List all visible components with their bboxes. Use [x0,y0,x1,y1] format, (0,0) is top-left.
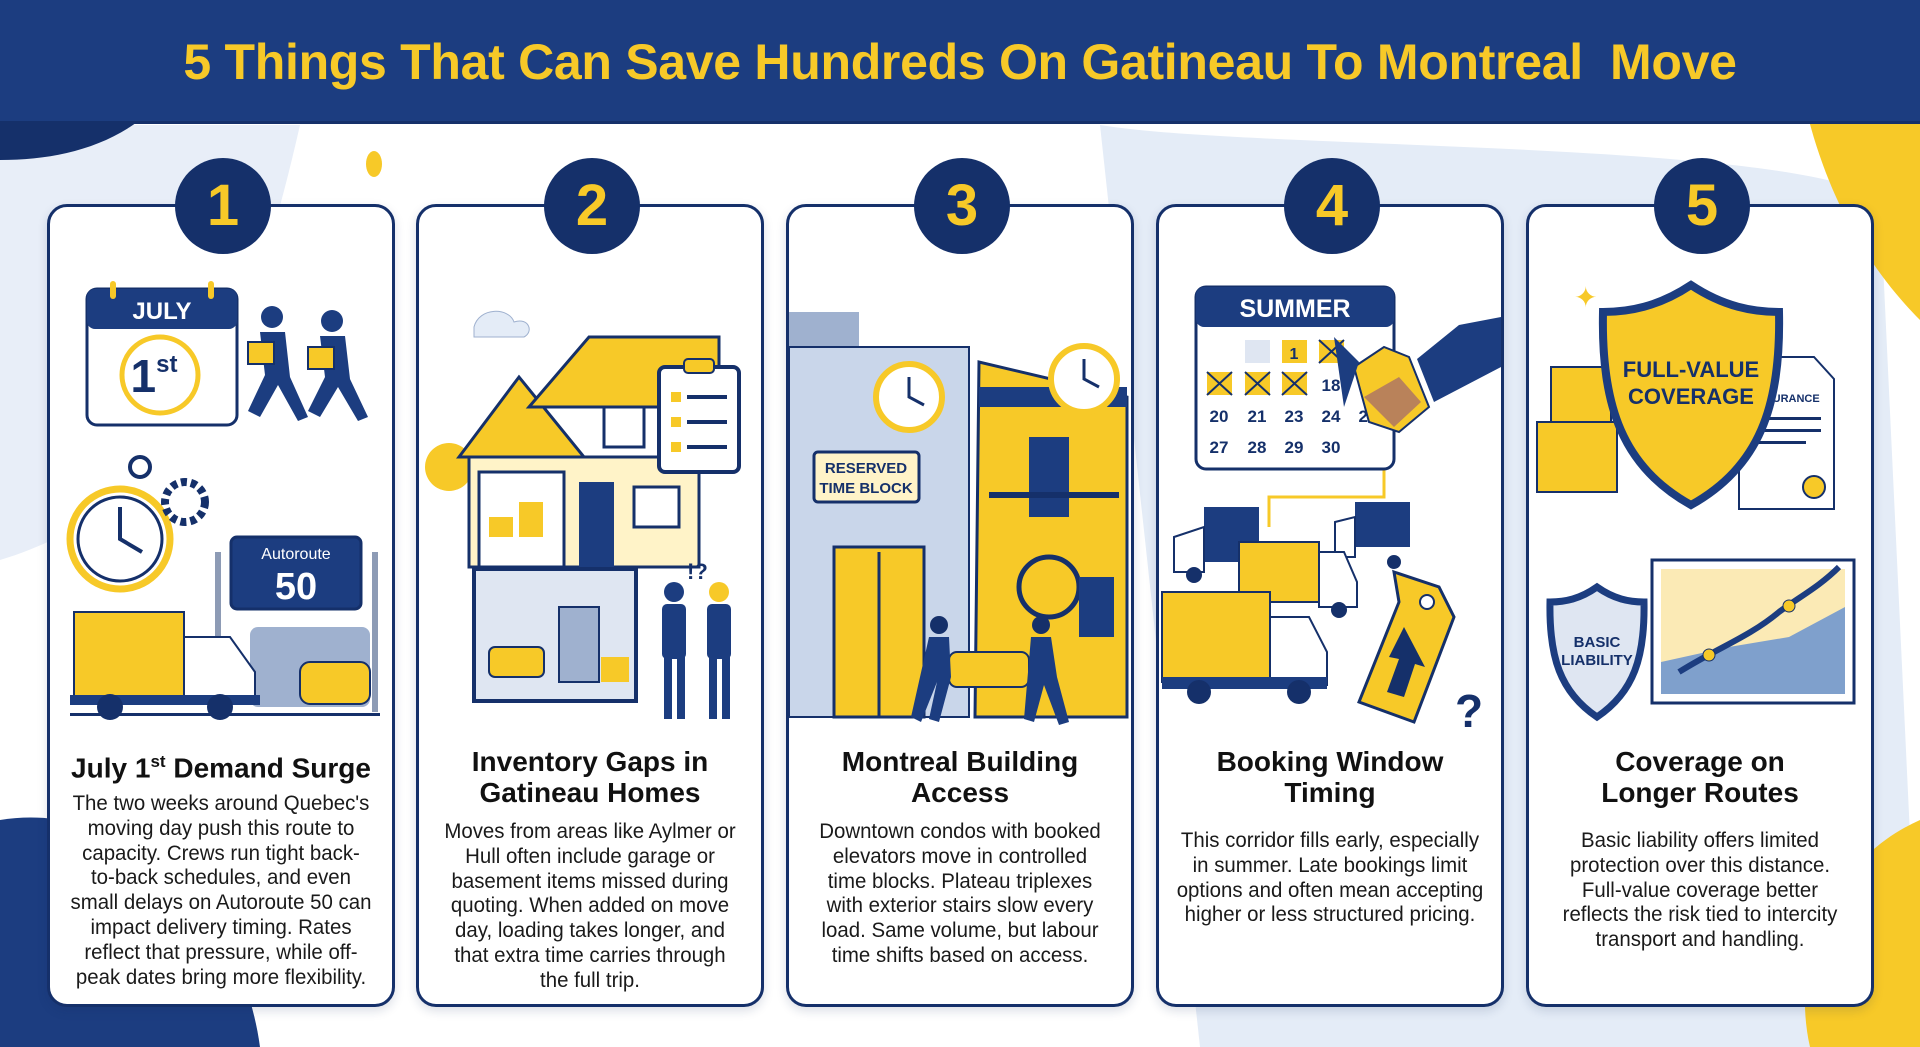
icon: clock and gears [70,457,205,589]
heading: Longer Routes [1601,777,1799,808]
icon: insurance document [1739,357,1834,509]
text block: time shifts based on access. [832,943,1088,967]
panel: card 3 [786,204,1134,1007]
text block: reflect that pressure, while off- [84,940,358,964]
text block: transport and handling. [1596,927,1804,951]
heading: Inventory Gaps in [472,746,708,777]
icon: price tag with arrow: ? [1455,685,1483,737]
illustration: full-value shield, insurance, basic shield, map [1536,280,1856,722]
text block [1177,828,1483,926]
icon: calendar july: st [156,351,177,378]
number badge 1 [175,158,271,254]
icon: summer calendar: 23 [1285,407,1303,426]
number badge 4: 4 [1316,173,1348,238]
icon: full-value shield: COVERAGE [1628,384,1754,409]
text block: quoting. When added on move [451,893,729,917]
icon: running movers [248,306,368,421]
text block: capacity. Crews run tight back- [82,841,360,865]
text block: impact delivery timing. Rates [90,915,352,939]
text block: Hull often include garage or [465,844,715,868]
icon: clipboard [659,359,739,472]
text block: in summer. Late bookings limit [1193,853,1467,877]
number badge 3 [914,158,1010,254]
icon: summer calendar: 24 [1322,407,1341,426]
illustration: house with garage and basement [425,310,741,719]
text block [819,819,1101,967]
icon: calendar july: 1 [131,350,156,402]
panel: card 5 [1526,204,1874,1007]
icon: movers carrying sofa [911,616,1069,725]
icon: condo tower with elevator: TIME BLOCK [819,480,913,497]
icon: insurance document: INSURANCE [1754,393,1820,405]
text block: small delays on Autoroute 50 can [71,890,371,914]
heading: Coverage on [1615,746,1785,777]
heading [1601,746,1799,808]
number badge 5 [1654,158,1750,254]
icon: summer calendar: 21 [1248,407,1266,426]
heading: Access [911,777,1009,808]
icon: boxes [1537,367,1617,492]
heading: Timing [1284,777,1376,808]
illustration: july calendar, runners, clock, highway, truck [66,281,380,720]
number badge 1: 1 [207,173,239,238]
icon: calendar july: JULY [132,298,192,325]
icon: summer calendar: 28 [1248,438,1266,457]
heading [842,746,1078,808]
number badge 5: 5 [1686,173,1718,238]
text block: options and often mean accepting [1177,878,1483,902]
number badge 4 [1284,158,1380,254]
icon: summer calendar: 20 [1210,407,1228,426]
icon: summer calendar: 27 [1210,438,1228,457]
text block: The two weeks around Quebec's [73,791,369,815]
icon: basic liability shield [1550,587,1644,717]
text block: time blocks. Plateau triplexes [828,869,1092,893]
icon: summer calendar: 25 [1359,407,1377,426]
icon: full-value shield: ✦ [1574,282,1597,313]
text block: day, loading takes longer, and [455,918,725,942]
panel: card 1 [47,204,395,1007]
icon: confused people: !? [687,559,708,584]
heading: Booking Window [1217,746,1443,777]
heading: July 1st Demand Surge [71,752,371,783]
text block [444,819,736,992]
icon: calendar july [87,281,237,425]
text block: protection over this distance. [1570,853,1830,877]
heading [472,746,708,808]
icon: basement [474,569,636,701]
number badge 2 [544,158,640,254]
text block: higher or less structured pricing. [1185,902,1475,926]
icon: autoroute 50 sign [215,537,378,712]
text block: to-back schedules, and even [91,865,351,889]
illustration: condo and triplex buildings [789,312,1128,725]
text block: Moves from areas like Aylmer or [444,819,736,843]
icon: autoroute 50 sign: Autoroute [261,546,331,563]
icon: full-value shield: FULL-VALUE [1623,357,1759,382]
icon: basic liability shield: LIABILITY [1561,652,1633,669]
text block [71,791,371,989]
icon: price tag with arrow [1359,572,1483,737]
icon: trucks [1162,502,1410,704]
text block [1563,828,1838,951]
title: 5 Things That Can Save Hundreds On Gatineau To Montreal Move [183,34,1737,90]
icon: condo tower with elevator [789,312,969,717]
icon: handshake [1334,317,1501,432]
text block: reflects the risk tied to intercity [1563,902,1837,926]
text block: that extra time carries through [454,943,726,967]
text block: the full trip. [540,968,640,992]
text block: elevators move in controlled [833,844,1087,868]
icon: route map [1652,560,1854,703]
panel: card 4 [1156,204,1504,1007]
icon: autoroute 50 sign: 50 [275,566,317,608]
heading [1217,746,1444,808]
number badge 3: 3 [946,173,978,238]
number badge 2: 2 [576,173,608,238]
text block: moving day push this route to [88,816,354,840]
text block: load. Same volume, but labour [821,918,1099,942]
panel: card 2 [416,204,764,1007]
icon: summer calendar: SUMMER [1239,295,1351,323]
text block: Basic liability offers limited [1581,828,1819,852]
text block: Full-value coverage better [1582,878,1818,902]
icon: summer calendar: 30 [1322,438,1340,457]
icon: house [425,311,719,567]
icon: truck in traffic [70,612,380,720]
icon: summer calendar: 18 [1322,376,1340,395]
icon: full-value shield [1574,282,1779,505]
header band [0,0,1920,124]
icon: condo tower with elevator: RESERVED [825,460,907,477]
icon: plateau triplex with spiral stairs [975,346,1127,717]
icon: summer calendar: 1 [1290,346,1299,363]
heading: Montreal Building [842,746,1078,777]
text block: This corridor fills early, especially [1181,828,1479,852]
icon: summer calendar: 29 [1285,438,1303,457]
text block: with exterior stairs slow every [827,893,1093,917]
text block: Downtown condos with booked [819,819,1101,843]
text block: basement items missed during [451,869,728,893]
icon: basic liability shield: BASIC [1574,634,1621,651]
illustration: summer calendar, handshake, trucks, price tag [1161,286,1501,737]
heading: Gatineau Homes [480,777,700,808]
icon: confused people [662,559,731,719]
text block: peak dates bring more flexibility. [76,965,366,989]
icon: summer calendar [1196,287,1394,527]
